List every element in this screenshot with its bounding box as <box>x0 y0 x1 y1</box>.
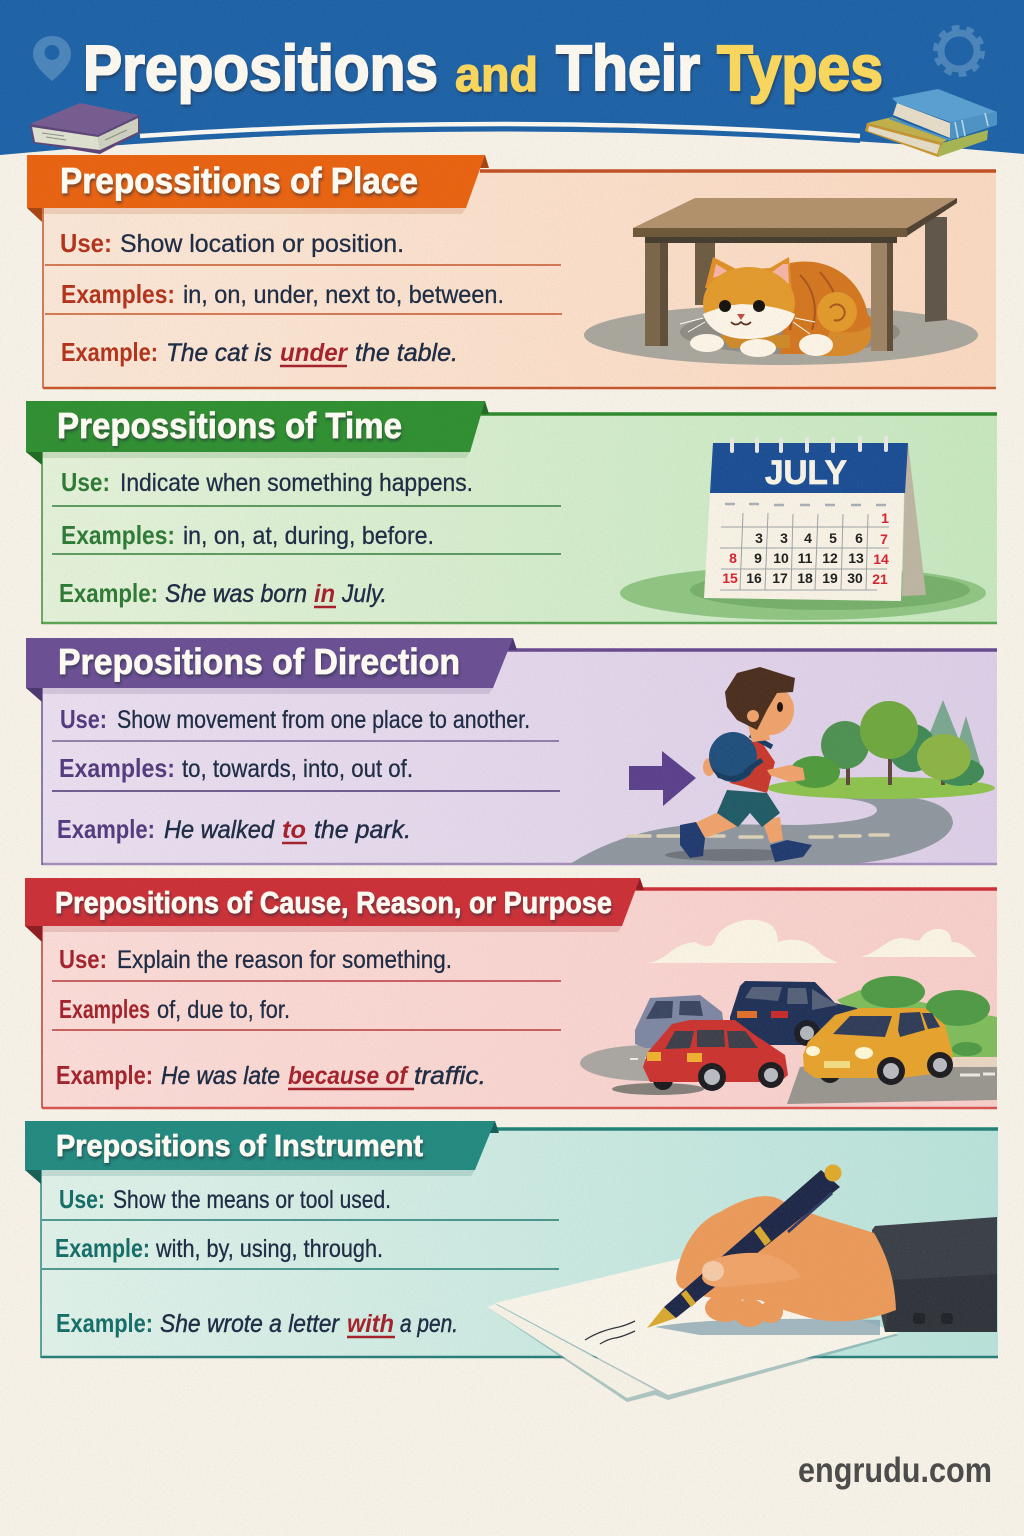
illustration: traffic <box>580 920 997 1104</box>
illustration: boy walking to park <box>570 667 995 864</box>
example sentence: cause: He was late <box>161 1062 280 1090</box>
panel: place <box>27 155 996 388</box>
example sentence: cause: traffic. <box>414 1062 486 1090</box>
example sentence: place: the table. <box>355 339 458 367</box>
example sentence: direction: the park. <box>314 816 411 844</box>
hand <box>676 1196 896 1321</box>
illustration: calendar <box>620 438 986 620</box>
use line: instrument <box>59 1184 391 1214</box>
use line: direction: Show movement from one place to another. <box>117 706 530 734</box>
calendar numbers: 5 <box>829 530 837 546</box>
calendar numbers: 9 <box>754 550 762 566</box>
calendar numbers: 19 <box>822 570 838 586</box>
calendar numbers: 4 <box>804 530 812 546</box>
example sentence: direction: Example: <box>57 814 155 844</box>
calendar numbers: 10 <box>773 550 789 566</box>
title <box>83 32 883 104</box>
illustration: cat under table <box>584 198 978 365</box>
examples line: instrument: Example: <box>55 1233 150 1263</box>
examples line: instrument: with, by, using, through. <box>155 1235 383 1263</box>
example sentence: cause: because of <box>288 1062 409 1090</box>
calendar numbers: 7 <box>880 531 888 547</box>
banner: direction: Prepositions of Direction <box>58 641 460 682</box>
banner: cause: Prepositions of Cause, Reason, or Purpose <box>55 885 612 920</box>
example sentence: cause: Example: <box>56 1060 153 1090</box>
example sentence: place: Example: <box>61 337 158 367</box>
example sentence: time: Example: <box>59 578 158 608</box>
calendar numbers: 1 <box>881 510 889 526</box>
use line: direction: Use: <box>60 704 107 734</box>
example sentence: direction <box>57 814 411 844</box>
arrow: direction <box>629 751 696 806</box>
example sentence: time: July. <box>341 580 387 608</box>
calendar numbers: 8 <box>729 550 737 566</box>
illustration: calendar: JULY <box>765 454 847 492</box>
banner: direction <box>26 638 517 702</box>
panel: instrument <box>25 1121 998 1402</box>
example sentence: instrument: with <box>347 1310 394 1338</box>
example sentence: direction: He walked <box>164 816 275 844</box>
examples line: time: in, on, at, during, before. <box>183 522 434 550</box>
calendar numbers: 15 <box>722 570 738 586</box>
title: and <box>455 49 538 102</box>
examples line: cause: of, due to, for. <box>157 996 290 1024</box>
boy <box>665 667 812 862</box>
illustration: hand writing with pen <box>487 1164 997 1402</box>
icon: stacked books <box>865 89 997 157</box>
banner: instrument: Prepositions of Instrument <box>56 1128 423 1163</box>
example sentence: time: in <box>314 580 335 608</box>
calendar rings <box>732 438 886 451</box>
example sentence: place: under <box>280 339 348 367</box>
calendar numbers: 17 <box>772 570 788 586</box>
title: Types <box>717 32 883 104</box>
examples line: place <box>61 279 504 309</box>
icon: gear <box>936 28 982 74</box>
panel: time <box>26 401 997 624</box>
calendar numbers: 13 <box>848 550 864 566</box>
calendar numbers: 14 <box>873 551 889 567</box>
panel: direction <box>26 638 997 865</box>
banner: time: Prepossitions of Time <box>57 405 402 446</box>
cat <box>680 257 874 357</box>
use line: instrument: Show the means or tool used. <box>113 1186 391 1214</box>
calendar numbers: 30 <box>847 570 863 586</box>
use line: place: Use: <box>60 228 112 258</box>
examples line: cause: Examples <box>59 994 150 1024</box>
paper <box>487 1258 899 1402</box>
use line: time: Use: <box>61 467 110 497</box>
example sentence: instrument: Example: <box>56 1308 153 1338</box>
example sentence: cause <box>56 1060 486 1090</box>
examples line: time <box>61 520 434 550</box>
navy car <box>730 981 857 1046</box>
header band <box>0 0 1024 155</box>
example sentence: place: The cat is <box>166 339 272 367</box>
calendar numbers: 3 <box>780 530 788 546</box>
examples line: cause <box>59 994 290 1024</box>
banner: place <box>27 155 489 222</box>
panel: cause <box>25 878 997 1108</box>
clouds <box>647 920 977 963</box>
banner: time <box>26 401 489 465</box>
calendar numbers: 21 <box>872 571 888 587</box>
calendar numbers <box>722 510 889 587</box>
examples line: instrument <box>55 1233 383 1263</box>
use line: place: Show location or position. <box>120 230 404 258</box>
sleeve <box>872 1217 997 1332</box>
icon: map pin <box>33 36 71 81</box>
fingers <box>705 1294 783 1327</box>
example sentence: instrument: a pen. <box>400 1310 458 1338</box>
examples line: direction: Examples: <box>59 753 175 783</box>
example sentence: time <box>59 578 387 608</box>
pen <box>647 1164 842 1328</box>
calendar numbers: 12 <box>822 550 838 566</box>
website credit: engrudu.com <box>798 1451 992 1490</box>
icon: purple book <box>30 103 140 154</box>
example sentence: time: She was born <box>165 580 307 608</box>
use line: cause: Explain the reason for something. <box>117 946 452 974</box>
calendar numbers: 6 <box>855 530 863 546</box>
examples line: direction: to, towards, into, out of. <box>182 755 413 783</box>
calendar numbers: 16 <box>746 570 762 586</box>
example sentence: place <box>61 337 458 367</box>
calendar numbers: 18 <box>797 570 813 586</box>
banner: cause <box>25 878 644 942</box>
grey car <box>635 995 727 1048</box>
thumb <box>702 1253 801 1287</box>
title: Their <box>556 32 700 104</box>
banner: place: Prepossitions of Place <box>60 160 418 201</box>
example sentence: instrument <box>56 1308 458 1338</box>
trees <box>837 976 997 1067</box>
calendar numbers: 11 <box>798 550 813 566</box>
examples line: direction <box>59 753 413 783</box>
examples line: time: Examples: <box>61 520 175 550</box>
examples line: place: Examples: <box>61 279 175 309</box>
use line: instrument: Use: <box>59 1184 105 1214</box>
title: Prepositions <box>83 32 438 104</box>
yellow car <box>803 1008 953 1085</box>
example sentence: instrument: She wrote a letter <box>160 1310 341 1338</box>
road <box>580 1045 720 1081</box>
use line: time: Indicate when something happens. <box>120 469 473 497</box>
example sentence: direction: to <box>282 816 306 844</box>
calendar numbers: 3 <box>755 530 763 546</box>
examples line: place: in, on, under, next to, between. <box>183 281 504 309</box>
banner: instrument <box>25 1121 499 1184</box>
red car <box>643 1020 788 1091</box>
calendar grid <box>720 504 889 590</box>
use line: cause: Use: <box>59 944 107 974</box>
